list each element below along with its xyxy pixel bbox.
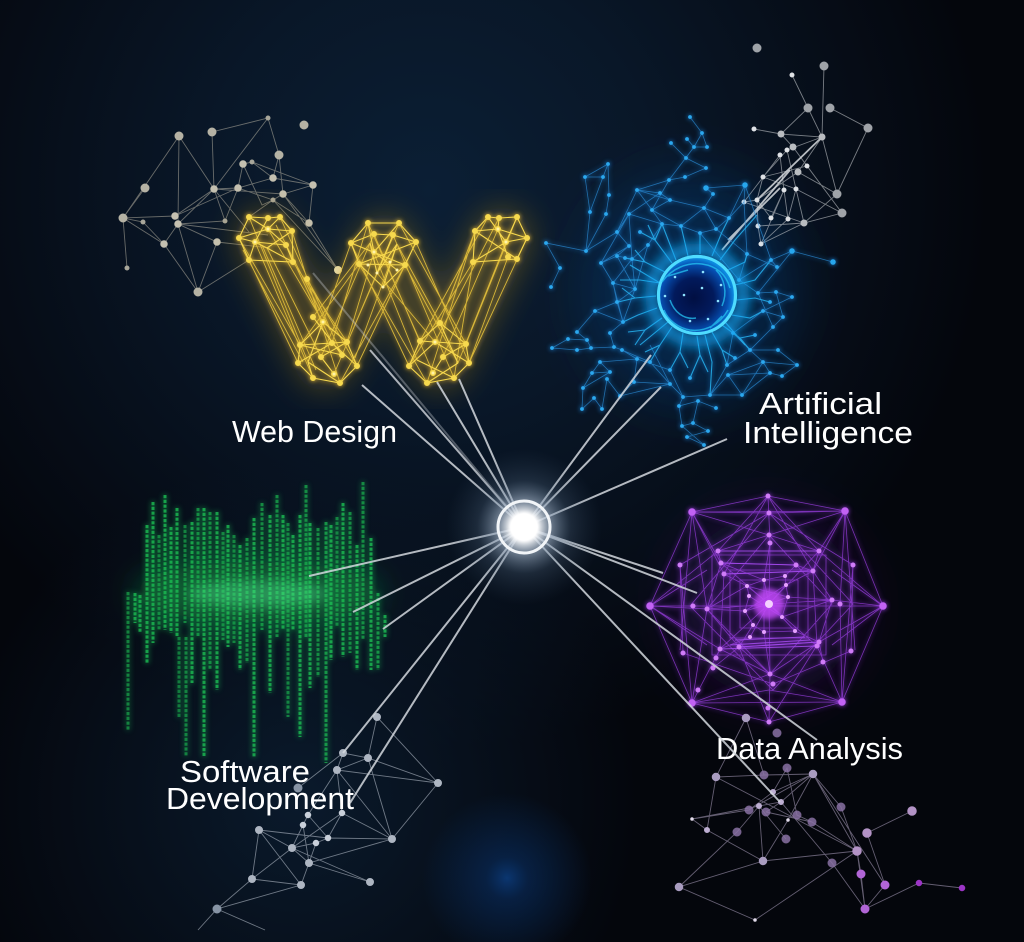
label: data analysis: Data Analysis <box>716 731 903 766</box>
gray network: artificial intelligence <box>722 48 868 250</box>
blue network <box>546 117 833 445</box>
label: software development <box>166 754 354 816</box>
artificial intelligence connectors <box>524 355 727 527</box>
panel: data analysis <box>650 496 962 920</box>
central hub <box>446 449 602 605</box>
label: web design: Web Design <box>232 414 397 449</box>
gray network: software development <box>198 717 438 930</box>
icon: glowing orb <box>651 249 743 341</box>
label: software development: Development <box>166 781 354 816</box>
label: artificial intelligence: Artificial <box>759 386 882 421</box>
blue haze <box>585 175 795 405</box>
software development connectors <box>309 527 524 803</box>
green code columns <box>128 482 385 763</box>
purple glow <box>678 516 858 696</box>
purple polygon mesh <box>650 496 883 722</box>
panel: web design <box>123 118 527 449</box>
yellow W mesh <box>239 217 527 383</box>
gray network: web design <box>123 118 338 292</box>
panel: artificial intelligence <box>546 48 913 450</box>
label: software development: Software <box>180 754 310 789</box>
connector lines: hub to each topic <box>309 273 817 803</box>
green glow <box>133 562 383 622</box>
label: artificial intelligence <box>743 386 913 450</box>
green bright band <box>188 581 328 607</box>
web design connectors <box>313 273 524 527</box>
gray-purple network <box>679 718 962 920</box>
panel: software development <box>128 482 438 930</box>
label: artificial intelligence: Intelligence <box>743 415 913 450</box>
yellow W glow <box>265 238 502 360</box>
data analysis connectors <box>524 527 817 802</box>
